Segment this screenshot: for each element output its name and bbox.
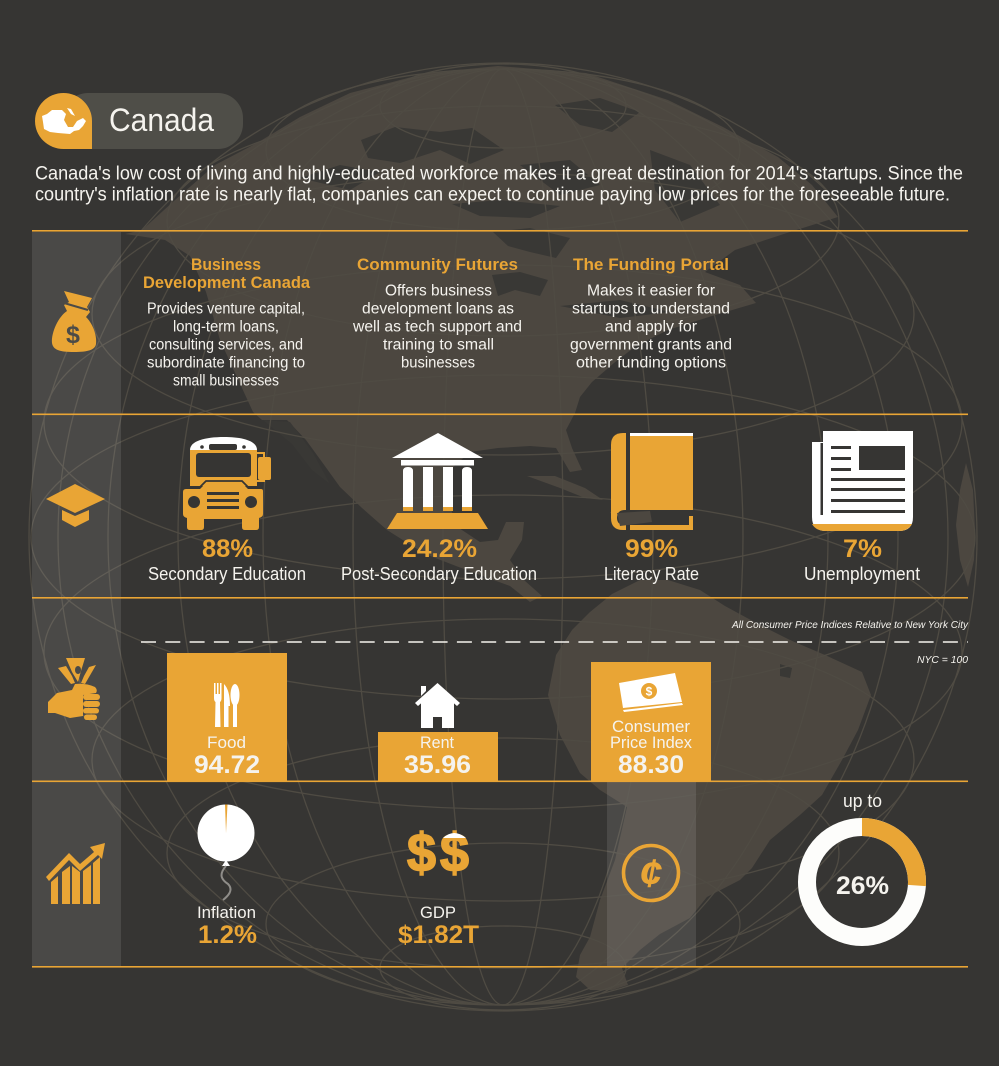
program: Community Futures: Offers business (385, 282, 492, 300)
stat: inflation: Inflation (197, 903, 256, 922)
cent column band (607, 782, 696, 967)
bar: rent (378, 683, 498, 781)
NYC = 100 baseline: NYC = 100 (917, 654, 968, 666)
icon: money bag: $ (66, 321, 80, 349)
program: Business Development Canada: small businesses (173, 372, 279, 390)
stat: post-secondary education (341, 433, 537, 584)
icon: book (611, 433, 693, 530)
stat: unemployment: Unemployment (804, 564, 920, 584)
stat: inflation: 1.2% (198, 921, 257, 949)
stat: secondary education (148, 437, 306, 584)
program: Business Development Canada: Provides venture capital, (147, 300, 305, 318)
icon: hand holding cash (48, 658, 100, 720)
bar: food (167, 653, 287, 781)
intro paragraph (35, 164, 963, 206)
program: Community Futures: well as tech support and (352, 318, 522, 336)
icon: graduation cap (46, 484, 105, 527)
stat: post-secondary education: Post-Secondary Education (341, 564, 537, 584)
bar: consumer price index (591, 662, 711, 781)
icon: banknotes: $ (646, 684, 653, 698)
program: Business Development Canada: subordinate financing to (147, 354, 305, 372)
stat: up to 26% donut: 26% (836, 872, 889, 900)
icon: cent coin: ¢ (640, 852, 662, 896)
stat: literacy rate: Literacy Rate (604, 564, 699, 584)
program: Business Development Canada (143, 256, 311, 390)
stat: literacy rate (604, 433, 699, 584)
icon: dollar signs: $ (440, 823, 469, 883)
icon: Canada map teardrop (35, 93, 92, 149)
program: Business Development Canada: long-term loans, (173, 318, 279, 336)
stat: literacy rate: 99% (625, 535, 678, 563)
donut chart (807, 827, 917, 937)
note: price index reference: All Consumer Price Indices Relative to New York City (731, 619, 969, 631)
stat: GDP: GDP (420, 903, 456, 922)
stat: inflation (197, 804, 257, 949)
stat: unemployment (804, 431, 920, 584)
title text: Canada (109, 102, 214, 138)
program: The Funding Portal: and apply for (605, 318, 697, 336)
icon: dollar signs: $ (407, 823, 436, 883)
program: The Funding Portal: The Funding Portal (573, 256, 729, 274)
stat: secondary education: 88% (202, 535, 253, 563)
icon: house (415, 683, 460, 728)
bar: rent: Rent (420, 733, 454, 752)
stat: up to 26% donut: up to (843, 791, 882, 811)
panel: funding programs (143, 256, 732, 390)
icon: growth chart (46, 843, 105, 904)
icon: balloon (198, 804, 254, 900)
program: Community Futures: Community Futures (357, 256, 518, 274)
icon column band (32, 232, 121, 967)
bar: consumer price index: Price Index (610, 733, 692, 752)
program: The Funding Portal: startups to understand (572, 300, 730, 318)
stat: GDP (398, 823, 479, 949)
icon: school bus (183, 437, 271, 530)
bar: consumer price index: Consumer (612, 717, 690, 736)
title pill (35, 93, 243, 149)
program: Business Development Canada: Development Canada (143, 274, 311, 292)
bar: consumer price index: 88.30 (618, 751, 684, 779)
icon: dollar signs (407, 823, 469, 883)
program: Business Development Canada: consulting services, and (149, 336, 303, 354)
program: The Funding Portal: government grants and (570, 336, 732, 354)
program: Community Futures: businesses (401, 354, 475, 372)
program: Community Futures: training to small (383, 336, 494, 354)
program: Community Futures: development loans as (362, 300, 514, 318)
bar: food: Food (207, 733, 246, 752)
stat: up to 26% donut (807, 791, 917, 937)
program: The Funding Portal: Makes it easier for (587, 282, 715, 300)
program: Community Futures (352, 256, 522, 372)
icon: money bag (52, 291, 96, 352)
icon: cent coin (624, 846, 678, 900)
program: Business Development Canada: Business (191, 256, 261, 274)
stat: secondary education: Secondary Education (148, 564, 306, 584)
section rules (32, 230, 968, 968)
intro paragraph: Canada's low cost of living and highly-educated workforce makes it a great destination for 2014's startups. Since the (35, 164, 963, 184)
icon: newspaper (812, 431, 913, 531)
stat: unemployment: 7% (843, 535, 882, 563)
stat: post-secondary education: 24.2% (402, 535, 477, 563)
icon: institution building (387, 433, 488, 529)
bar: food: 94.72 (194, 751, 260, 779)
icon: cutlery (214, 683, 240, 727)
bar: rent: 35.96 (404, 751, 471, 779)
program: The Funding Portal (570, 256, 732, 372)
intro paragraph: country's inflation rate is nearly flat, companies can expect to continue paying low prices for the foreseeable future. (35, 184, 950, 206)
stat: GDP: $1.82T (398, 921, 479, 949)
program: The Funding Portal: other funding options (576, 354, 726, 372)
